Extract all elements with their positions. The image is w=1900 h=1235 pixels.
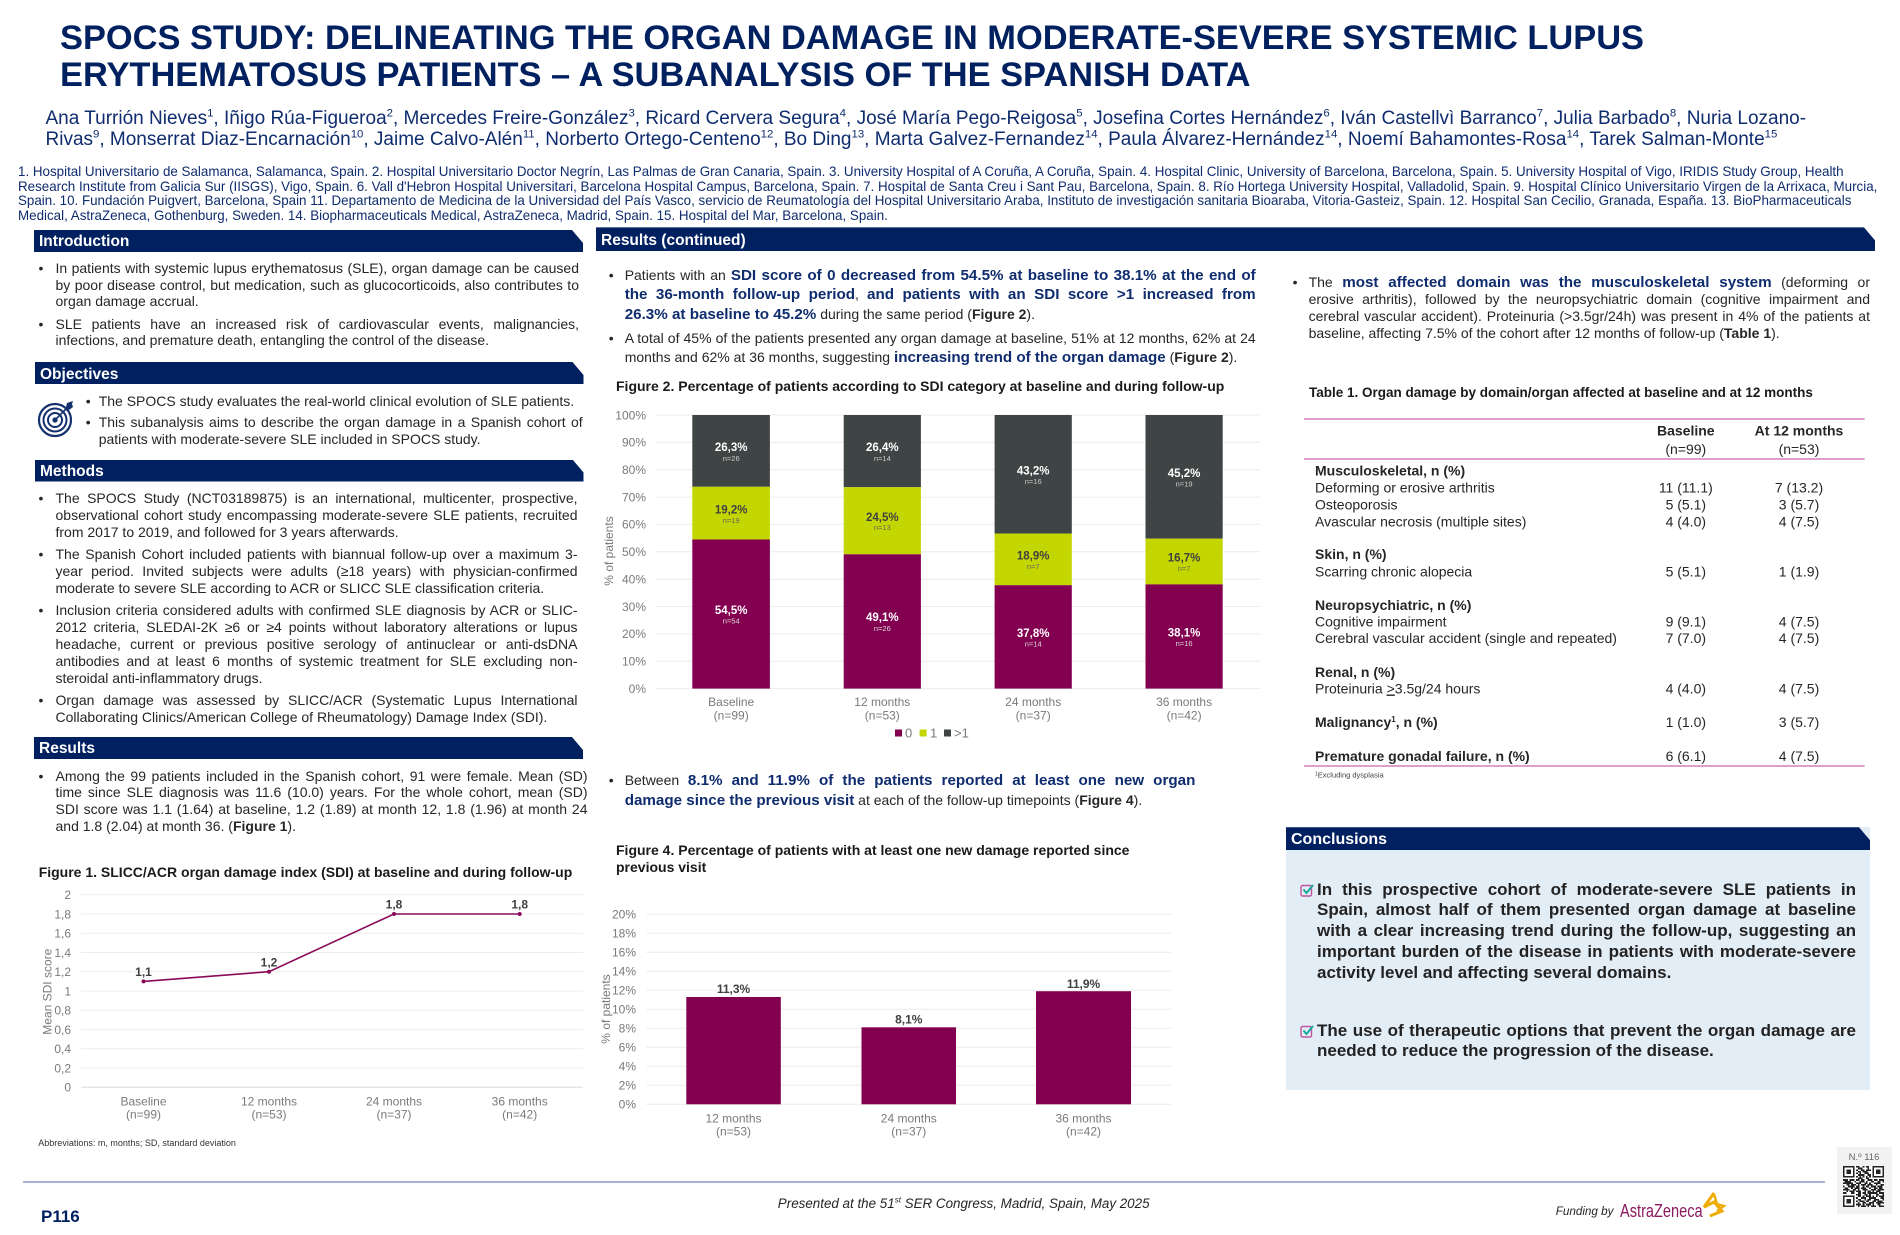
line chart: figure 1: 1,6 [54, 926, 71, 940]
table 1: 4 (4.0) [1666, 513, 1706, 529]
bar: baseline: 54,5% [715, 605, 748, 617]
bar: 24 months: n=16 [1025, 477, 1042, 486]
text: methods: moderate to severe SLE according to ACR or SLICC SLE classification criteria. [56, 580, 544, 596]
text: methods: Organ damage was assessed by SLICC/ACR (Systematic Lupus International [56, 692, 578, 708]
bar: 24 months: 37,8% [1017, 628, 1050, 640]
bar chart: figure 4: 16% [612, 946, 636, 960]
text: methods: antibodies and at least 6 months of systemic treatment for SLE excluding non- [56, 653, 578, 669]
bar chart: figure 4: 10% [612, 1003, 636, 1017]
bar: 12 months [844, 415, 921, 689]
text: • [609, 772, 614, 788]
conclusion text 2 [1317, 1021, 1856, 1060]
text: • [1293, 274, 1298, 290]
conclusion text 1: In this prospective cohort of moderate-severe SLE patients in [1317, 880, 1856, 899]
heading: Results: Results [39, 740, 95, 757]
heading: Objectives [34, 362, 584, 384]
text: methods: headache, current or previous positive serology of antinuclear or anti-dsDNA [56, 636, 578, 652]
stacked bar chart: figure 2: 60% [622, 518, 646, 532]
bar chart: figure 4: 18% [612, 927, 636, 941]
heading: Conclusions [1286, 827, 1870, 850]
icon: QR code [1843, 1166, 1884, 1207]
figure 4 title [616, 842, 1129, 875]
line chart: figure 1: (n=99) [126, 1108, 161, 1122]
bar: 24 months: n=14 [1025, 639, 1042, 648]
stacked bar chart: figure 2: 0% [629, 682, 646, 696]
bar chart: figure 4: 12% [612, 984, 636, 998]
legend [895, 726, 969, 740]
text: results [38, 768, 588, 834]
text: objectives: The SPOCS study evaluates the real-world clinical evolution of SLE patients. [99, 393, 574, 409]
conclusion text 2: The use of therapeutic options that prevent the organ damage are [1317, 1021, 1856, 1040]
text: methods: observational cohort study encompassing moderate-severe SLE patients, recruited [56, 507, 578, 523]
table 1: 1 [1315, 772, 1318, 778]
table 1 [1304, 418, 1865, 780]
text: • [38, 490, 43, 506]
bar chart: figure 4: 8,1% [895, 1013, 923, 1027]
line chart: figure 1: 1,1 [135, 965, 152, 979]
conclusion text 1: activity level and affecting several domains. [1317, 963, 1671, 982]
bar chart: figure 4: 0% [619, 1098, 636, 1112]
bar chart: figure 4: (n=37) [891, 1125, 926, 1139]
text: methods: 2012 criteria, SLEDAI-2K ≥6 or ≥4 points without laboratory alterations or lupus [56, 619, 578, 635]
text: objectives: This subanalysis aims to describe the organ damage in a Spanish cohort of [99, 414, 583, 430]
table 1: Premature gonadal failure, n (%) [1315, 748, 1530, 764]
bar chart: figure 4: (n=42) [1066, 1125, 1101, 1139]
line chart: figure 1: 1,2 [261, 955, 278, 969]
table 1: Proteinuria >3.5g/24 hours [1315, 680, 1480, 696]
text: methods: The SPOCS Study (NCT03189875) is an international, multicenter, prospective, [56, 490, 578, 506]
stacked bar chart: figure 2 [602, 408, 1260, 740]
icon: target [38, 401, 73, 438]
title [60, 18, 1644, 94]
line chart: figure 1: 36 months [492, 1094, 548, 1108]
table 1: Osteoporosis [1315, 496, 1397, 512]
line chart: figure 1: 0,6 [54, 1023, 71, 1037]
bar chart: figure 4: 12 months [705, 1111, 762, 1125]
line chart: figure 1: Mean SDI score [40, 948, 54, 1035]
table 1: 4 (7.5) [1779, 513, 1819, 529]
bar chart: figure 4: (n=53) [716, 1125, 751, 1139]
text: SDI score results: months and 62% at 36 months, suggesting increasing trend of the organ damage (Figure 2). [625, 349, 1237, 366]
bar chart: figure 4: 6% [619, 1041, 636, 1055]
figure 4 title: previous visit [616, 859, 706, 875]
text: most affected domain: The most affected domain was the musculoskeletal system (deforming or [1309, 274, 1870, 291]
table 1: 5 (5.1) [1666, 496, 1706, 512]
line chart: figure 1: 0,8 [54, 1004, 71, 1018]
text: most affected domain: cerebral vascular accident). Proteinuria (>3.5gr/24h) was present in 4% of the patients at [1309, 308, 1870, 324]
stacked bar chart: figure 2: 50% [622, 545, 646, 559]
text: results: time since SLE diagnosis was 11.6 (10.0) years. For the whole cohort, mean (SD) [56, 784, 588, 800]
bar chart: figure 4: 11,3% [717, 982, 751, 996]
text: introduction: SLE patients have an increased risk of cardiovascular events, malignancies, [56, 316, 579, 332]
line chart: figure 1: 0 [64, 1081, 71, 1095]
stacked bar chart: figure 2: 70% [622, 490, 646, 504]
text: • [609, 330, 614, 346]
text: introduction: organ damage accrual. [56, 293, 199, 309]
conclusion text 1: with a clear increasing trend during the follow-up, suggesting an [1317, 921, 1856, 940]
authors [46, 108, 1806, 150]
table 1: Avascular necrosis (multiple sites) [1315, 513, 1526, 529]
line chart: figure 1: 1,4 [54, 946, 71, 960]
table 1: 1 [1391, 715, 1396, 724]
stacked bar chart: figure 2: 20% [622, 627, 646, 641]
stacked bar chart: figure 2: 40% [622, 572, 646, 586]
stacked bar chart: figure 2: 90% [622, 436, 646, 450]
text: new organ damage: damage since the previous visit at each of the follow-up timepoints (Figure 4). [625, 792, 1142, 809]
table 1: Renal, n (%) [1315, 664, 1395, 680]
table 1: 1 (1.9) [1779, 563, 1819, 579]
heading: Conclusions: Conclusions [1291, 831, 1387, 848]
QR block [1836, 1147, 1892, 1214]
title: SPOCS STUDY: DELINEATING THE ORGAN DAMAGE IN MODERATE-SEVERE SYSTEMIC LUPUS [60, 18, 1644, 56]
text: results: SDI score was 1.1 (1.64) at baseline, 1.2 (1.89) at month 12, 1.8 (1.96) at month 24 [56, 801, 588, 817]
icon: AstraZeneca logo [1702, 1192, 1727, 1218]
QR label: N.º 116 [1849, 1152, 1879, 1163]
bar: 36 months: n=16 [1176, 639, 1193, 648]
line chart: figure 1: 24 months [366, 1094, 422, 1108]
line chart: figure 1: Baseline [120, 1094, 167, 1108]
table 1: At 12 months [1755, 422, 1844, 438]
text: methods: Inclusion criteria considered adults with confirmed SLE diagnosis by ACR or SLIC- [56, 602, 578, 618]
table 1: Cerebral vascular accident (single and repeated) [1315, 630, 1617, 646]
text: new organ damage [609, 772, 1195, 809]
stacked bar chart: figure 2: 12 months [854, 695, 910, 709]
bar: 24 months [995, 415, 1072, 689]
table 1: 4 (7.5) [1779, 680, 1819, 696]
bar: 36 months: 45,2% [1168, 468, 1200, 480]
stacked bar chart: figure 2: 100% [615, 408, 646, 422]
table 1: 4 (4.0) [1666, 680, 1706, 696]
bar: 12 months: 24,5% [866, 512, 899, 524]
line chart: figure 1: 12 months [241, 1094, 297, 1108]
bar chart: figure 4: 2% [619, 1079, 636, 1093]
heading: Introduction: Introduction [39, 233, 129, 250]
authors: Rivas9, Monserrat Diaz-Encarnación10, Jaime Calvo-Alén11, Norberto Ortego-Centeno12, Bo Ding13, Marta Galvez-Fernandez14, Paula Álvarez-Hernández14, Noemí Bahamontes-Rosa14, Tarek Salman-Monte15 [46, 128, 1777, 150]
line chart: figure 1: 0,2 [54, 1061, 71, 1075]
bar: 24 months: 18,9% [1017, 550, 1050, 562]
affiliations: Medical, AstraZeneca, Gothenburg, Sweden. 14. Biopharmaceuticals Medical, AstraZeneca, Madrid, Spain. 15. Hospital del Mar, Barcelona, Spain. [18, 208, 888, 222]
congress note: Presented at the 51st SER Congress, Madrid, Spain, May 2025 [778, 1196, 1150, 1211]
heading: Introduction [34, 230, 583, 252]
affiliations: 1. Hospital Universitario de Salamanca, Salamanca, Spain. 2. Hospital Universitario Doctor Negrín, Las Palmas de Gran Canaria, Spain. 3. University Hospital of A Coruña, A Coruña, Spain. 4. Hospital Clinic, University of Barcelona, Barcelona, Spain. 5. University Hospital of Vigo, IRIDIS Study Group, Health [18, 164, 1844, 179]
affiliations [18, 164, 1877, 223]
table 1: Scarring chronic alopecia [1315, 563, 1472, 579]
bar: baseline: n=54 [723, 616, 740, 625]
table 1: 3 (5.7) [1779, 496, 1819, 512]
stacked bar chart: figure 2: (n=42) [1167, 709, 1202, 723]
bar: baseline: 19,2% [715, 504, 748, 516]
bar: 36 months: n=7 [1178, 564, 1190, 573]
line chart: figure 1: 2 [64, 888, 71, 902]
table 1: 5 (5.1) [1666, 563, 1706, 579]
authors: Ana Turrión Nieves1, Iñigo Rúa-Figueroa2, Mercedes Freire-González3, Ricard Cervera Segura4, José María Pego-Reigosa5, Josefina Cortes Hernández6, Iván Castellvì Barranco7, Julia Barbado8, Nuria Lozano- [46, 108, 1806, 129]
text: SDI score results: A total of 45% of the patients presented any organ damage at baseline, 51% at 12 months, 62% at 24 [625, 330, 1256, 346]
figure 2 title: Figure 2. Percentage of patients according to SDI category at baseline and during follow-up [616, 378, 1224, 394]
text: most affected domain: erosive arthritis), followed by the neuropsychiatric domain (cognitive impairment and [1309, 291, 1870, 307]
stacked bar chart: figure 2: % of patients [602, 516, 616, 586]
table 1: 9 (9.1) [1666, 614, 1706, 630]
stacked bar chart: figure 2: 30% [622, 600, 646, 614]
bar: baseline: 26,3% [715, 442, 748, 454]
table 1: , n (%) [1396, 714, 1438, 730]
bar: baseline [692, 415, 770, 689]
text: • [38, 602, 43, 618]
table 1: 4 (7.5) [1779, 614, 1819, 630]
AstraZeneca wordmark: AstraZeneca [1620, 1201, 1703, 1221]
text: results: and 1.8 (2.04) at month 36. (Figure 1). [56, 818, 296, 834]
line chart: figure 1: (n=37) [376, 1108, 412, 1122]
heading: Results (continued): Results (continued) [601, 232, 746, 249]
bar: 36 months [1146, 415, 1223, 689]
panel: conclusions [1286, 827, 1870, 1090]
table 1: (n=53) [1779, 441, 1819, 457]
table 1: (n=99) [1665, 441, 1706, 457]
bar: 36 months: 16,7% [1168, 552, 1200, 564]
legend: 0 [905, 726, 912, 740]
legend: >1 [954, 726, 969, 740]
heading: Objectives: Objectives [40, 366, 118, 383]
text: • [38, 260, 43, 276]
text: introduction: infections, and premature death, entangling the control of the disease. [56, 332, 489, 348]
table 1: 11 (11.1) [1659, 479, 1713, 495]
icon: check 2 [1300, 1025, 1314, 1038]
text: new organ damage: Between 8.1% and 11.9% of the patients reported at least one new organ [625, 772, 1195, 789]
bar chart: figure 4 [599, 908, 1171, 1139]
text: objectives: patients with moderate-severe SLE included in SPOCS study. [99, 431, 481, 447]
conclusion text 2: needed to reduce the progression of the disease. [1317, 1041, 1714, 1060]
bar chart: figure 4: 8% [619, 1022, 636, 1036]
bar: 24 months: 43,2% [1017, 466, 1050, 478]
text: • [86, 393, 91, 409]
text: introduction: In patients with systemic lupus erythematosus (SLE), organ damage can be caused [56, 260, 579, 276]
text: most affected domain: baseline, affecting 7.5% of the cohort after 12 months of follow-up (Table 1). [1309, 325, 1780, 341]
text: methods: from 2017 to 2019, and followed for 3 years afterwards. [56, 524, 399, 540]
text: • [609, 266, 614, 282]
bar chart: figure 4: 36 months [1055, 1111, 1112, 1125]
text: methods: The Spanish Cohort included patients with biannual follow-up over a maximum 3- [56, 546, 578, 562]
text: introduction: by poor disease control, but medication, such as glucocorticoids, also contributes to [56, 277, 579, 293]
stacked bar chart: figure 2: (n=53) [865, 709, 900, 723]
text: SDI score results: the 36-month follow-up period, and patients with an SDI score >1 increased from [625, 286, 1256, 303]
text: most affected domain [1293, 274, 1870, 341]
line chart: figure 1: (n=42) [502, 1108, 537, 1122]
text: methods: Collaborating Clinics/American College of Rheumatology) Damage Index (SDI). [56, 709, 547, 725]
text: SDI score results [609, 266, 1256, 366]
heading: Methods: Methods [40, 462, 104, 480]
table 1: 6 (6.1) [1666, 748, 1706, 764]
bar: 36 months: n=19 [1176, 480, 1193, 488]
table 1: Excluding dysplasia [1318, 770, 1384, 780]
stacked bar chart: figure 2: 36 months [1156, 695, 1212, 709]
text: • [38, 316, 43, 332]
table 1: Neuropsychiatric, n (%) [1315, 597, 1471, 613]
poster number: P116 [41, 1207, 80, 1226]
stacked bar chart: figure 2: 10% [622, 654, 646, 668]
text: objectives [86, 393, 583, 447]
text: • [38, 768, 43, 784]
abbreviations note: Abbreviations: m, months; SD, standard deviation [38, 1138, 236, 1148]
stacked bar chart: figure 2: (n=37) [1016, 709, 1051, 723]
bar: 12 months: 26,4% [866, 442, 899, 454]
affiliations: Spain. 10. Fundación Puigvert, Barcelona, Spain 11. Departamento de Medicina de la Universidad del País Vasco, servicio de Reumatología del Hospital Universitario Araba, Instituto de investigación sanitaria Bioaraba, Vitoria-Gasteiz, Spain. 12. Hospital San Cecilio, Granada, España. 13. BioPharmaceuticals [18, 193, 1851, 208]
bar: 24 months: n=7 [1027, 562, 1040, 571]
line chart: figure 1: 1,8 [386, 897, 403, 911]
conclusion text 1: important burden of the disease in patients with moderate-severe [1317, 942, 1856, 961]
bar: 12 months: 49,1% [866, 612, 899, 624]
line chart: figure 1: 1,8 [511, 897, 528, 911]
conclusion text 1 [1317, 880, 1856, 982]
bar chart: figure 4: 11,9% [1067, 977, 1101, 991]
table 1: 4 (7.5) [1779, 748, 1819, 764]
line chart: figure 1: 1 [64, 984, 71, 998]
bar: baseline: n=19 [723, 516, 740, 525]
stacked bar chart: figure 2: 24 months [1005, 695, 1061, 709]
heading: Results [34, 737, 583, 759]
table 1: 3 (5.7) [1779, 714, 1819, 730]
bar: 36 months: 38,1% [1168, 627, 1200, 639]
figure 4 title: Figure 4. Percentage of patients with at least one new damage reported since [616, 842, 1129, 858]
text: • [38, 546, 43, 562]
figure 1 title: Figure 1. SLICC/ACR organ damage index (SDI) at baseline and during follow-up [39, 864, 572, 880]
bar chart: figure 4: % of patients [599, 974, 613, 1044]
funding label: Funding by [1556, 1205, 1614, 1218]
text: SDI score results: 26.3% at baseline to 45.2% during the same period (Figure 2). [625, 306, 1035, 323]
stacked bar chart: figure 2: 80% [622, 463, 646, 477]
bar chart: figure 4: 20% [612, 908, 636, 922]
conclusion text 1: Spain, almost half of them presented organ damage at baseline [1317, 900, 1856, 919]
line chart: figure 1: 1,2 [54, 965, 71, 979]
line chart: figure 1: (n=53) [251, 1108, 287, 1122]
table 1: Deforming or erosive arthritis [1315, 479, 1495, 495]
bar: 12 months: n=26 [874, 624, 891, 633]
line chart: figure 1: 1,8 [54, 907, 71, 921]
title: ERYTHEMATOSUS PATIENTS – A SUBANALYSIS OF THE SPANISH DATA [60, 56, 1250, 94]
legend: 1 [930, 726, 937, 740]
icon: check 1 [1300, 884, 1314, 897]
heading: Methods [34, 460, 584, 482]
heading: Results (continued) [596, 227, 1875, 251]
table 1: Baseline [1657, 422, 1715, 438]
table 1: Cognitive impairment [1315, 614, 1447, 630]
table 1 title: Table 1. Organ damage by domain/organ affected at baseline and at 12 months [1309, 385, 1813, 400]
text: results: Among the 99 patients included in the Spanish cohort, 91 were female. Mean (SD) [56, 768, 588, 784]
bar chart: figure 4: 4% [619, 1060, 636, 1074]
bar: 12 months: n=13 [874, 523, 891, 532]
stacked bar chart: figure 2: (n=99) [714, 709, 749, 723]
text: methods: year period. Invited subjects were adults (≥18 years) with physician-confirmed [56, 563, 578, 579]
text: • [38, 692, 43, 708]
text: methods: steroidal anti-inflammatory drugs. [56, 670, 262, 686]
text: introduction [38, 260, 579, 348]
line chart: figure 1 [40, 888, 583, 1122]
table 1: 1 (1.0) [1666, 714, 1706, 730]
funding [1556, 1192, 1727, 1221]
table 1: Skin, n (%) [1315, 546, 1387, 562]
stacked bar chart: figure 2: Baseline [708, 695, 755, 709]
bar: baseline: n=26 [723, 454, 740, 463]
affiliations: Research Institute from Galicia Sur (IISGS), Vigo, Spain. 6. Vall d'Hebron Hospital Universitari, Barcelona Hospital Campus, Barcelona, Spain. 7. Hospital de Santa Creu i Sant Pau, Barcelona, Spain. 8. Río Hortega University Hospital, Valladolid, Spain. 9. Hospital Clínico Universitario Virgen de la Arrixaca, Murcia, [18, 178, 1877, 194]
text: SDI score results: Patients with an SDI score of 0 decreased from 54.5% at baseline to 38.1% at the end of [625, 266, 1256, 284]
table 1: 7 (13.2) [1775, 479, 1823, 495]
table 1: Malignancy [1315, 714, 1391, 730]
bar: 12 months: n=14 [874, 454, 891, 463]
table 1: 4 (7.5) [1779, 630, 1819, 646]
bar chart: figure 4: 14% [612, 965, 636, 979]
text: • [86, 414, 91, 430]
bar chart: figure 4: 24 months [881, 1111, 937, 1125]
table 1: Musculoskeletal, n (%) [1315, 463, 1465, 479]
text: methods [38, 490, 578, 725]
line chart: figure 1: 0,4 [54, 1042, 71, 1056]
table 1: 7 (7.0) [1666, 630, 1706, 646]
